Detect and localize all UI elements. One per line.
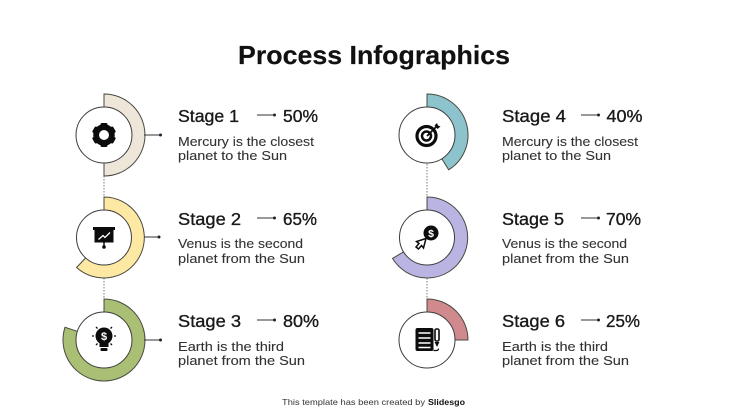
arrow to value 4 bbox=[581, 114, 600, 116]
panel: stage 2 bbox=[76, 197, 317, 278]
description 3: Earth is the third bbox=[178, 340, 284, 354]
heading: stage 4: Stage 4 bbox=[502, 106, 566, 126]
icon: document and pen bbox=[416, 328, 439, 351]
center disc 4 bbox=[399, 107, 455, 163]
icon: target bbox=[417, 123, 440, 146]
arrow to value 6 bbox=[581, 318, 600, 322]
connector arrow 1 bbox=[144, 134, 162, 136]
center disc 2 bbox=[76, 210, 132, 265]
description 4 bbox=[502, 135, 639, 163]
footer credit: Slidesgo bbox=[428, 397, 465, 407]
arrow to value 2 bbox=[257, 216, 276, 220]
description 6 bbox=[502, 340, 629, 368]
icon: cursor and coin bbox=[416, 226, 438, 249]
description 4: planet to the Sun bbox=[502, 149, 611, 163]
value: 65%: 65% bbox=[283, 209, 317, 229]
ring: 50% beige bbox=[104, 94, 145, 176]
center disc 3 bbox=[76, 312, 132, 368]
footer credit: This template has been created by bbox=[282, 397, 426, 407]
heading: stage 5: Stage 5 bbox=[502, 209, 564, 229]
description 1: planet to the Sun bbox=[178, 149, 287, 163]
ring: 80% green bbox=[63, 299, 145, 381]
heading: stage 3: Stage 3 bbox=[178, 311, 241, 331]
panel: stage 3 bbox=[63, 299, 319, 381]
icon: cursor and coin: $ bbox=[428, 228, 434, 240]
description 2: planet from the Sun bbox=[178, 252, 305, 266]
description 2: Venus is the second bbox=[178, 237, 303, 251]
value: 70%: 70% bbox=[606, 209, 641, 229]
value: 80%: 80% bbox=[283, 311, 319, 331]
heading: stage 2: Stage 2 bbox=[178, 209, 241, 229]
icon: idea bulb with dollar: $ bbox=[101, 331, 107, 343]
description 3 bbox=[178, 340, 305, 368]
arrow to value 3 bbox=[257, 318, 276, 322]
title: Process Infographics bbox=[238, 40, 510, 70]
connector arrow 2 bbox=[144, 236, 160, 238]
description 5: Venus is the second bbox=[502, 237, 627, 251]
value: 50%: 50% bbox=[283, 106, 318, 126]
ring: 65% yellow bbox=[77, 197, 144, 278]
panel: stage 4 bbox=[399, 94, 642, 170]
description 1: Mercury is the closest bbox=[178, 135, 315, 149]
value: 25%: 25% bbox=[606, 311, 640, 331]
icon: gear bbox=[92, 123, 116, 147]
connector arrow 3 bbox=[144, 338, 162, 342]
arrow to value 5 bbox=[581, 216, 600, 220]
panel: stage 6 bbox=[399, 299, 640, 368]
description 3: planet from the Sun bbox=[178, 354, 305, 368]
description 1 bbox=[178, 135, 315, 163]
heading: stage 6: Stage 6 bbox=[502, 311, 565, 331]
icon: idea bulb with dollar bbox=[92, 327, 116, 351]
panel: stage 5 bbox=[392, 197, 641, 278]
heading: stage 1: Stage 1 bbox=[178, 106, 239, 126]
description 5: planet from the Sun bbox=[502, 252, 629, 266]
ring: 70% purple bbox=[392, 197, 468, 278]
icon: presentation board bbox=[93, 227, 115, 249]
description 2 bbox=[178, 237, 305, 266]
description 6: Earth is the third bbox=[502, 340, 608, 354]
description 5 bbox=[502, 237, 629, 266]
panel: stage 1 bbox=[76, 94, 318, 176]
description 6: planet from the Sun bbox=[502, 354, 629, 368]
description 4: Mercury is the closest bbox=[502, 135, 639, 149]
center disc 1 bbox=[76, 107, 132, 163]
ring: 40% teal bbox=[427, 94, 468, 170]
value: 40%: 40% bbox=[606, 106, 642, 126]
ring: 25% rose bbox=[427, 299, 468, 340]
arrow to value 1 bbox=[257, 114, 276, 116]
center disc 6 bbox=[399, 312, 455, 368]
center disc 5 bbox=[400, 210, 454, 265]
